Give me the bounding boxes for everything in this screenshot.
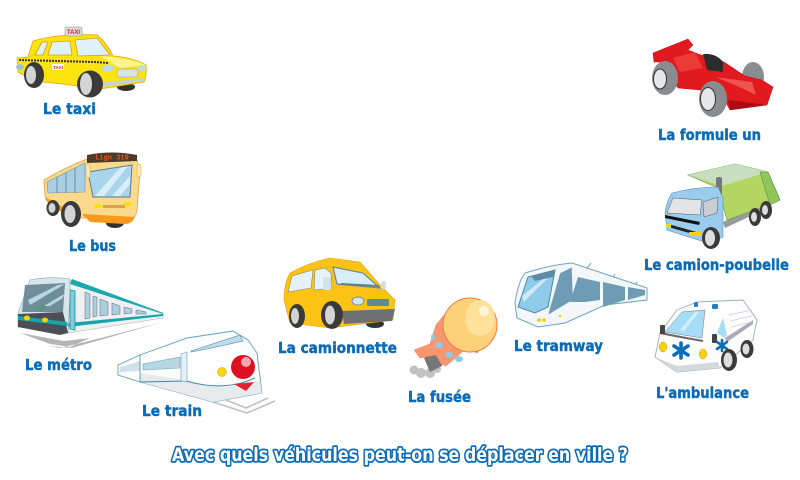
label: tram: Le tramway <box>514 337 603 355</box>
label: bus: Le bus <box>69 237 116 255</box>
ambulance wheels <box>721 340 754 371</box>
taxi sign: TAXI <box>67 30 80 36</box>
truck front wheel <box>702 227 720 249</box>
vehicle: train <box>118 331 275 413</box>
vehicle: bus <box>44 152 141 228</box>
vehicle: taxi <box>16 27 146 98</box>
label: ambulance: L'ambulance <box>656 384 749 402</box>
vehicle: formula one <box>652 39 773 117</box>
vehicle: metro: Lign <box>34 305 46 311</box>
taxi wheels <box>24 62 103 98</box>
vehicle: tram <box>515 263 647 327</box>
title: Avec quels véhicules peut-on se déplacer en ville ? <box>172 444 628 466</box>
F1 wheels <box>652 61 727 117</box>
vehicle: metro <box>18 278 163 348</box>
label: train: Le train <box>142 402 202 420</box>
vehicle: ambulance <box>655 300 757 372</box>
vehicle: van <box>284 258 395 329</box>
ambulance asterisks <box>674 340 727 358</box>
label: taxi: Le taxi <box>43 100 96 118</box>
rocket smoke <box>410 365 441 378</box>
vehicle: bus: Lign 319 <box>95 154 129 162</box>
label: formula one: La formule un <box>658 126 761 144</box>
F1 cockpit <box>703 54 723 72</box>
bus wheels <box>46 200 81 227</box>
van wheels <box>289 301 343 329</box>
label: van: La camionnette <box>278 339 397 357</box>
label: metro: Le métro <box>25 356 92 374</box>
train nose <box>218 355 255 379</box>
vehicle: rocket <box>410 298 497 378</box>
vehicle: taxi: TAXI <box>53 65 63 70</box>
truck rear wheels <box>749 201 772 226</box>
label: rocket: La fusée <box>408 388 471 406</box>
vehicle: garbage truck <box>665 164 780 249</box>
